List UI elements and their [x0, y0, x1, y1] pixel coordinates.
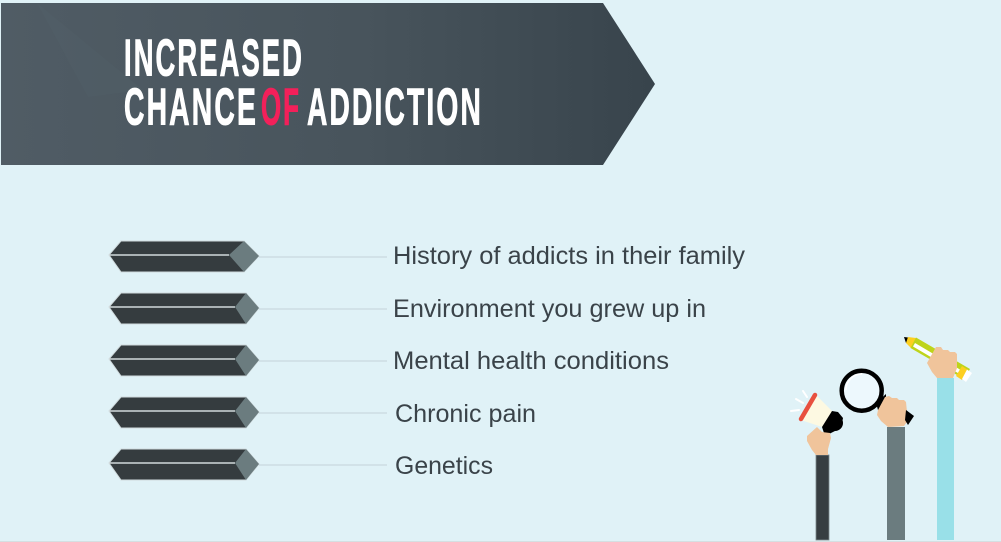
- icon: hand holding pencil: [904, 337, 972, 540]
- list row 1: [109, 241, 746, 272]
- list row 4: [109, 397, 536, 428]
- title: OF: [261, 78, 301, 136]
- list row 2: [109, 293, 706, 324]
- icon: hand holding megaphone: [791, 391, 843, 540]
- list row 3: Mental health conditions: [393, 347, 669, 375]
- list row 2: Environment you grew up in: [393, 295, 706, 323]
- title: INCREASED: [124, 30, 304, 88]
- title banner: [1, 3, 655, 165]
- list row 5: Genetics: [395, 452, 493, 480]
- title: ADDICTION: [307, 78, 483, 136]
- list row 5: [109, 449, 493, 480]
- list row 4: Chronic pain: [395, 400, 536, 428]
- icon: hand holding magnifying glass: [842, 371, 914, 540]
- title: CHANCE: [124, 78, 258, 136]
- title: [124, 30, 483, 136]
- list row 3: [109, 345, 669, 376]
- list row 1: History of addicts in their family: [393, 242, 746, 270]
